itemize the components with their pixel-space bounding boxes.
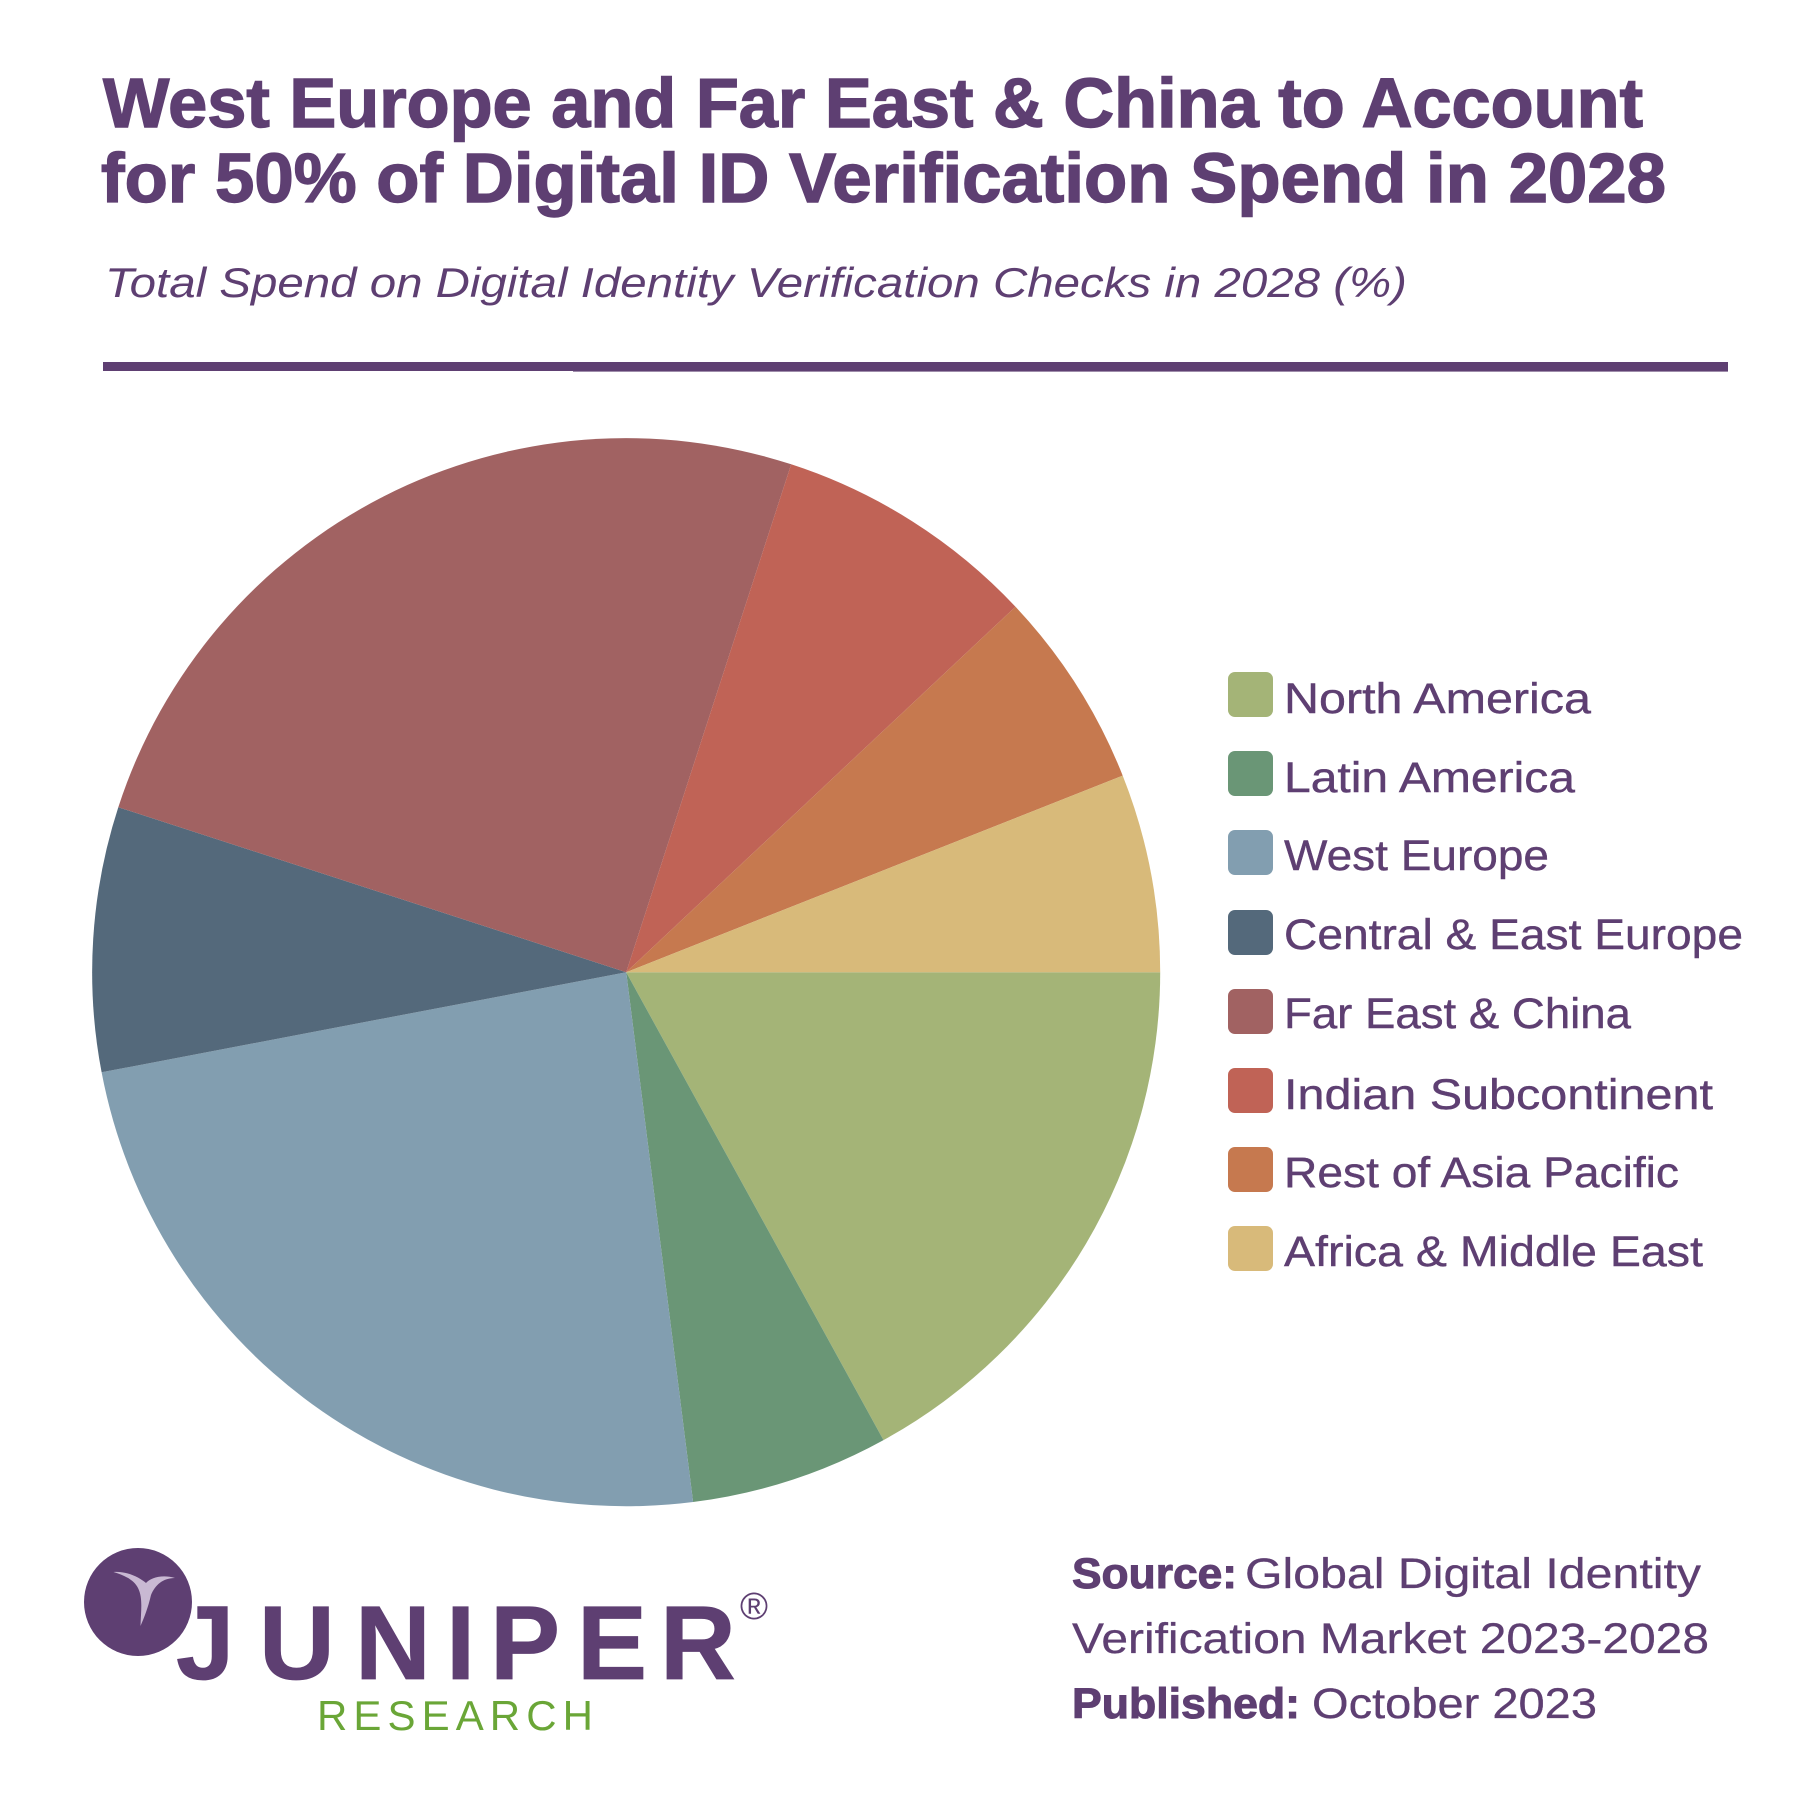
slice: North America 17% [626, 972, 1160, 1440]
slice: Indian Subcontinent 8% [626, 464, 1016, 972]
legend item: West Europe: West Europe [1284, 832, 1549, 880]
logo: Juniper Research [84, 1548, 768, 1739]
pie chart [92, 438, 1160, 1506]
source line 1: Global Digital Identity [1245, 1550, 1702, 1598]
legend item: North America: North America [1284, 675, 1591, 723]
slice: Far East & China 25% [118, 438, 791, 972]
slice: Rest of Asia Pacific 6% [626, 607, 1123, 972]
legend item: Latin America: Latin America [1284, 754, 1575, 802]
legend item: Central & East Europe: Central & East Europe [1284, 911, 1743, 959]
subtitle: Total Spend on Digital Identity Verification Checks in 2028 (%) [105, 259, 1407, 306]
legend item: Rest of Asia Pacific: Rest of Asia Pacific [1284, 1149, 1679, 1197]
icon: logo circle [84, 1548, 192, 1656]
source line 2: Verification Market 2023-2028 [1072, 1615, 1709, 1663]
slice: Latin America 6% [626, 972, 884, 1502]
legend item: Far East & China: Far East & China [1284, 990, 1631, 1038]
icon: logo bird [114, 1572, 175, 1626]
legend item: Indian Subcontinent: Indian Subcontinent [1284, 1071, 1713, 1119]
logo registered mark: ® [740, 1586, 768, 1628]
slice: West Europe 24% [102, 972, 693, 1506]
legend [1228, 672, 1743, 1276]
title: for 50% of Digital ID Verification Spend in 2028 [101, 139, 1666, 217]
title [101, 64, 1666, 217]
published line: Published: [1072, 1680, 1300, 1728]
published line: October 2023 [1312, 1680, 1597, 1728]
title: West Europe and Far East & China to Account [103, 64, 1643, 142]
source line 1: Source: [1072, 1550, 1237, 1598]
slice: Central & East Europe 8% [92, 807, 626, 1072]
source and publication details [1072, 1550, 1709, 1728]
legend item: Africa & Middle East: Africa & Middle East [1284, 1228, 1703, 1276]
slice: Africa & Middle East 6% [626, 776, 1160, 972]
logo tagline: RESEARCH [317, 1692, 593, 1739]
logo wordmark: JUNIPER [176, 1585, 736, 1702]
